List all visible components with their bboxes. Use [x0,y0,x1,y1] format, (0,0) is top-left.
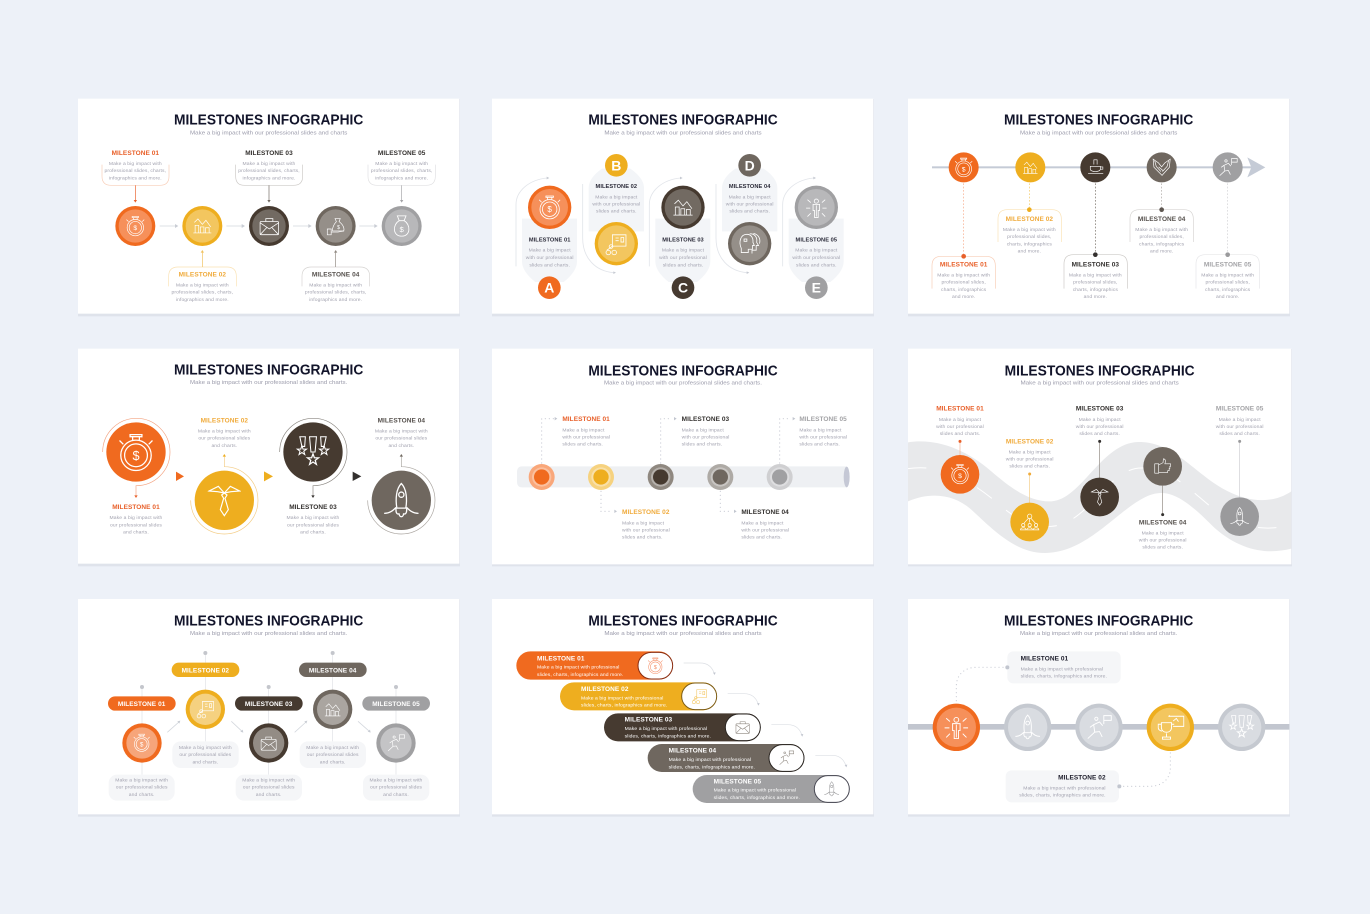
milestone 03 column: Make a big impact [662,248,705,254]
node 01 [529,464,555,490]
milestone 01 pill [516,651,673,680]
text: milestone 01 [562,416,610,448]
milestone 02: MILESTONE 02 [201,417,248,424]
milestone 01 column: with our professional [526,255,574,261]
node 04 [707,464,733,490]
milestone 04: MILESTONE 04 [309,667,357,674]
milestone 04 column: Make a big impact [729,194,771,200]
milestone 04: and more. [1150,248,1173,254]
background column shapes [522,169,844,282]
milestone 01: charts, infographics [941,287,987,293]
milestone 05 column [792,186,840,299]
milestone 04 [1139,447,1187,551]
milestone 01: MILESTONE 01 [940,262,988,269]
text: milestone 02: Make a big impact [622,520,665,526]
milestone 03: MILESTONE 03 [245,701,293,708]
subtitle: Make a big impact with our professional slides and charts. [1020,631,1178,637]
milestone 04 [1130,152,1193,254]
milestone 05 column: MILESTONE 05 [796,237,837,243]
callout: milestone 04: professional slides, charts, [305,290,366,296]
milestone 04 column: MILESTONE 04 [729,184,771,190]
milestone 04: and charts. [388,443,414,449]
milestone 01 [936,406,984,494]
milestone 01 column: A [544,280,554,296]
arrow: 1 to 2 [176,472,184,481]
milestone 03 pill: Make a big impact with professional [625,726,707,732]
milestone 05: Make a big impact with [370,778,423,784]
callout: milestone 02: infographics and more. [176,297,229,303]
milestone 01: our professional slides [110,522,162,528]
milestone 02: and more. [1018,248,1041,254]
callout: milestone 03: infographics and more. [243,175,295,181]
milestone 01: and charts. [129,792,155,798]
milestone 01: slides and charts. [940,431,980,437]
milestone 05: and more. [1216,294,1239,300]
milestone 02 column: B [611,157,621,173]
milestone 05 pill: slides, charts, infographics and more. [714,795,800,801]
text: milestone 04 [741,509,789,541]
milestone 02: our professional slides [179,752,232,758]
subtitle: Make a big impact with our professional slides and charts [1020,381,1179,387]
panel: large circles with outline rings [78,349,460,566]
milestone 03 [1076,406,1124,516]
title: MILESTONES INFOGRAPHIC [174,113,364,129]
milestone 04 pill: MILESTONE 04 [669,747,717,754]
text: milestone 04: Make a big impact [741,520,784,526]
milestone 01 column [526,186,574,299]
callout: milestone 01: MILESTONE 01 [112,150,159,157]
milestone 02: Make a big impact with [1003,227,1056,233]
milestone 03: with our professional [1076,424,1124,430]
milestone 04 pill [648,744,804,772]
milestone 01 [932,152,995,300]
milestone 04: MILESTONE 04 [378,417,425,424]
milestone 03: slides and charts. [1079,431,1120,437]
milestone 02: with our professional [1006,456,1054,462]
callout: milestone 02: professional slides, charts, [172,290,233,296]
milestone 05: with our professional [1216,424,1264,430]
milestone 03 column [659,186,707,299]
text: milestone 01: Make a big impact [562,427,605,433]
milestone 02 [191,417,258,534]
milestone 03: MILESTONE 03 [1076,406,1124,413]
node 05 [767,464,793,490]
arrow tips [547,177,816,274]
panel: timeline arrow with hanging callouts [908,99,1290,316]
milestone 02: MILESTONE 02 [182,667,229,674]
card: milestone 01 [1007,651,1121,683]
milestone 03: professional slides, [1073,280,1118,286]
milestone 04: charts, infographics [1139,241,1185,247]
milestone 05: MILESTONE 05 [372,701,420,708]
connector stems [142,653,396,775]
arrow: 3 to 4 [353,472,361,481]
milestone 03 [235,696,303,801]
milestone 01: and more. [952,294,975,300]
milestone 02 pill: MILESTONE 02 [581,686,629,693]
milestone 01: professional slides, [941,280,986,286]
dotted connector 01 [956,665,1009,701]
curved step arrows [684,663,846,765]
milestone 02 [998,152,1061,254]
text: milestone 04: slides and charts. [741,535,782,541]
milestone 04 column: with our professional [726,202,774,208]
milestone 01 pill: Make a big impact with professional [537,665,619,671]
panel: lettered A to E columns [492,99,874,316]
diagonal arrows [167,721,371,733]
card: milestone 02: Make a big impact with professional [1023,786,1106,792]
milestone 01: Make a big impact with [110,515,163,521]
milestone 04 pill: slides, charts, infographics and more. [669,764,755,770]
callout: milestone 03 [236,150,303,203]
milestone 01 [108,696,176,801]
milestone 04 [299,663,367,768]
card: milestone 02: MILESTONE 02 [1058,775,1106,782]
text: milestone 02: with our professional [622,528,670,534]
node 4: yellow trophy [1147,704,1194,751]
milestone 03 [280,418,347,535]
text: milestone 03 [682,416,730,448]
milestone 02: and charts. [192,759,218,765]
subtitle: Make a big impact with our professional slides and charts [1020,130,1178,136]
title: MILESTONES INFOGRAPHIC [588,363,778,379]
milestone 05: professional slides, [1205,280,1250,286]
milestone 05 pill [693,775,850,803]
milestone 01 column: slides and charts. [529,262,570,268]
callout: milestone 01: Make a big impact with [109,161,162,167]
milestone 02: Make a big impact [1009,449,1051,455]
subtitle: Make a big impact with our professional slides and charts [604,631,762,637]
text: milestone 02: slides and charts. [622,535,663,541]
milestone 01: MILESTONE 01 [118,701,166,708]
subtitle: Make a big impact with our professional slides and charts. [190,631,348,637]
milestone 05 column: slides and charts. [796,262,837,268]
milestone 04: our professional slides [307,752,359,758]
milestone 02 pill: Make a big impact with professional [581,695,663,701]
milestone 04: Make a big impact with [375,428,428,434]
milestone 03: and charts. [256,792,282,798]
callout: milestone 05: Make a big impact with [375,161,428,167]
dotted connectors [542,419,790,511]
milestone 05: MILESTONE 05 [1204,262,1252,269]
milestone 04: MILESTONE 04 [1138,216,1186,223]
callout: milestone 02: MILESTONE 02 [179,272,226,279]
milestone 02 column: with our professional [592,202,640,208]
callout: milestone 03: professional slides, charts, [238,168,300,174]
road band [908,441,1291,553]
milestone 05 pill: Make a big impact with professional [714,788,796,794]
milestone 03: Make a big impact with [287,515,340,521]
text: milestone 05 [799,416,847,448]
milestone 02 [1006,438,1054,541]
milestone 05: and charts. [383,792,409,798]
subtitle: Make a big impact with our professional slides and charts [604,130,762,136]
node 1: orange person [933,704,980,751]
milestone 03 pill: slides, charts, infographics and more. [625,733,711,739]
milestone 03 [1064,152,1127,300]
milestone 04: and charts. [320,759,346,765]
card: milestone 02 [1006,770,1119,802]
panel: staircase pills [492,599,874,817]
text: milestone 04: with our professional [741,528,789,534]
callout: milestone 05: professional slides, charts, [371,168,432,174]
milestone 04: slides and charts. [1142,545,1183,551]
milestone 03: our professional slides [287,522,339,528]
circle with chart icon [182,206,222,246]
milestone 01: with our professional [936,424,984,430]
milestone 01 [103,418,170,535]
milestone 03: MILESTONE 03 [289,504,337,511]
milestone 02: charts, infographics [1007,241,1052,247]
panel: staggered pills with cards [78,599,460,817]
callout: milestone 05: MILESTONE 05 [378,150,426,157]
arrow: 2 to 3 [264,471,273,481]
milestone 05 column: Make a big impact [795,248,838,254]
milestone 02: Make a big impact with [179,745,232,751]
step arrow tips [713,672,847,767]
circle with briefcase icon [249,206,289,246]
milestone 02: slides and charts. [1009,464,1050,470]
subtitle: Make a big impact with our professional slides and charts [190,130,348,136]
subtitle: Make a big impact with our professional slides and charts. [190,380,348,386]
milestone 03: MILESTONE 03 [1072,262,1119,269]
milestone 03: Make a big impact with [242,778,295,784]
text: milestone 03: Make a big impact [682,427,724,433]
milestone 05: charts, infographics [1205,287,1251,293]
milestone 01 column: MILESTONE 01 [529,237,570,243]
milestone 02 [172,663,239,768]
node 02 [588,464,614,490]
callout: milestone 03: MILESTONE 03 [245,150,293,157]
milestone 04: our professional slides [375,436,428,442]
milestone 05: our professional slides [370,785,422,791]
text: milestone 05: with our professional [799,435,847,441]
title: MILESTONES INFOGRAPHIC [1004,113,1194,129]
callout: milestone 01: professional slides, charts, [105,168,166,174]
card: milestone 01: slides, charts, infographics and more. [1021,674,1107,680]
milestone 04 pill: Make a big impact with professional [669,757,751,763]
milestone 03: Make a big impact [1079,417,1121,423]
milestone 02 column: Make a big impact [595,194,638,200]
milestone 04: Make a big impact with [306,745,359,751]
stem end dots [140,651,398,689]
title: MILESTONES INFOGRAPHIC [1004,613,1194,629]
node 2: gray rocket [1004,704,1051,751]
text: milestone 01: slides and charts. [562,442,603,448]
timeline bar [517,466,850,487]
milestone 03: and more. [1084,294,1107,300]
milestone 03 column: slides and charts. [663,262,703,268]
milestone 03 column: with our professional [659,255,707,261]
card: milestone 02: slides, charts, infographics and more. [1019,793,1106,799]
node 03 [648,464,674,490]
panel: five circles with alternating callouts [78,99,460,316]
milestone 02 pill [560,682,717,710]
node 5: gray medals [1218,704,1265,751]
node 3: gray climber [1075,704,1123,751]
milestone 03 pill: MILESTONE 03 [625,717,673,724]
dotted connector 02 [1117,753,1170,788]
text: milestone 01: with our professional [562,435,610,441]
milestone 02: professional slides, [1007,234,1052,240]
milestone 05 pill: MILESTONE 05 [714,778,762,785]
milestone 01 column: Make a big impact [529,248,571,254]
milestone 05 [362,696,430,801]
callout: milestone 01: infographics and more. [109,175,162,181]
milestone 02 column [592,154,640,265]
text: milestone 03: MILESTONE 03 [682,416,730,423]
text: milestone 03: slides and charts. [682,442,722,448]
title: MILESTONES INFOGRAPHIC [588,613,778,629]
milestone 04 column [726,154,774,265]
milestone 02: MILESTONE 02 [1006,216,1053,223]
milestone 01: our professional slides [116,785,168,791]
milestone 01: MILESTONE 01 [112,504,160,511]
callout: milestone 04: infographics and more. [309,297,362,303]
callout: milestone 05 [368,150,435,203]
milestone 05: Make a big impact with [1201,273,1254,279]
subtitle: Make a big impact with our professional slides and charts. [604,381,762,387]
text: milestone 03: with our professional [682,435,729,441]
horizontal line [908,724,1289,730]
milestone 03 column: MILESTONE 03 [662,237,704,243]
card: milestone 01: Make a big impact with professional [1021,667,1103,673]
milestone 04 [368,417,435,534]
milestone 02 column: MILESTONE 02 [596,184,637,190]
text: milestone 02: MILESTONE 02 [622,509,670,516]
milestone 05 [1196,152,1259,300]
arrow tips [555,417,795,513]
milestone 03: and charts. [300,529,326,535]
milestone 04: Make a big impact [1142,531,1184,537]
milestone 02: our professional slides [198,436,251,442]
text: milestone 05: slides and charts. [799,442,840,448]
callout: milestone 02: Make a big impact with [176,283,229,289]
text: milestone 04: MILESTONE 04 [741,509,789,516]
title: MILESTONES INFOGRAPHIC [588,113,778,129]
milestone 01: and charts. [123,529,149,535]
milestone 01 pill: slides, charts, infographics and more. [537,672,623,678]
panel: winding road [908,349,1292,566]
milestone 02: Make a big impact with [198,428,251,434]
milestone 01: Make a big impact [939,417,982,423]
milestone 05 [1216,406,1264,536]
callout: milestone 01 [102,150,169,203]
milestone 01: Make a big impact with [115,778,168,784]
callout: milestone 02 [169,250,236,303]
milestone 05: Make a big impact [1219,417,1261,423]
milestone 04: professional slides, [1139,234,1184,240]
connector arrows [160,224,378,228]
circle with money bag icon [382,206,422,246]
callout: milestone 05: infographics and more. [375,175,428,181]
panel: horizontal bar timeline [492,349,874,566]
milestone 04: Make a big impact with [1135,227,1188,233]
milestone 02 column: slides and charts. [596,209,637,215]
milestone 03 pill [604,713,761,741]
curved arrows [516,178,814,273]
text: milestone 01: MILESTONE 01 [562,416,610,423]
text: milestone 05: Make a big impact [799,427,842,433]
callout: milestone 04: Make a big impact with [309,283,362,289]
milestone 05 column: with our professional [792,255,840,261]
milestone 04: MILESTONE 04 [1139,519,1187,526]
milestone 04 column: slides and charts. [729,209,770,215]
milestone 01 pill: MILESTONE 01 [537,655,585,662]
timeline arrow [932,157,1265,177]
milestone 02: and charts. [211,443,237,449]
circle with money hand icon [316,206,356,246]
milestone 01: Make a big impact with [937,273,990,279]
milestone 02: MILESTONE 02 [1006,438,1054,445]
milestone 01: MILESTONE 01 [936,406,984,413]
panel: circles on line with two cards [908,599,1290,817]
card: milestone 01: MILESTONE 01 [1021,656,1069,663]
milestone 05 column: E [812,280,821,296]
milestone 04: with our professional [1139,538,1187,544]
circle with stopwatch icon [115,206,155,246]
text: milestone 02 [622,509,670,541]
callout: milestone 04 [302,250,370,303]
callout: milestone 03: Make a big impact with [243,161,296,167]
milestone 03 column: C [678,280,688,296]
text: milestone 05: MILESTONE 05 [799,416,847,423]
milestone 02 pill: slides, charts, infographics and more. [581,703,667,709]
milestone 04 column: D [745,157,755,173]
callout: milestone 04: MILESTONE 04 [312,272,360,279]
title: MILESTONES INFOGRAPHIC [174,613,364,629]
milestone 05: MILESTONE 05 [1216,406,1264,413]
title: MILESTONES INFOGRAPHIC [174,363,364,379]
milestone 03: charts, infographics [1073,287,1118,293]
milestone 03: our professional slides [243,785,295,791]
title: MILESTONES INFOGRAPHIC [1005,363,1195,379]
milestone 03: Make a big impact with [1069,273,1122,279]
milestone 05: slides and charts. [1219,431,1260,437]
